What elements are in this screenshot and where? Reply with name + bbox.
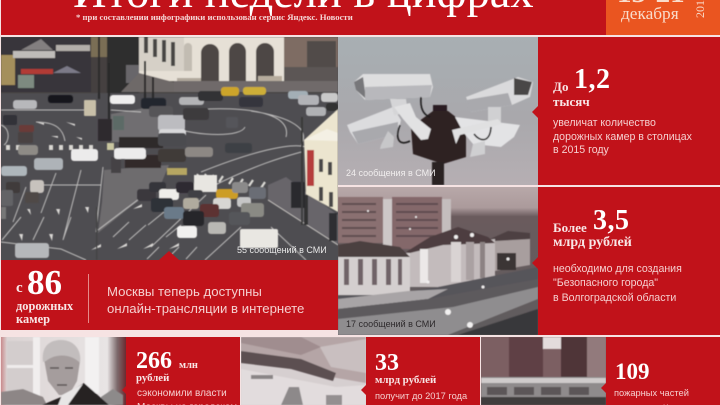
number 266: 266 xyxy=(136,348,172,374)
road markings xyxy=(1,109,306,260)
description xyxy=(107,284,304,316)
panel: 109 fire stations xyxy=(606,337,720,405)
description: пожарных частей xyxy=(614,388,689,398)
photo: moscow intersection xyxy=(1,37,338,260)
unit: млрд рублей xyxy=(553,235,632,250)
pointer xyxy=(361,385,366,395)
description xyxy=(553,117,692,156)
unit: тысяч xyxy=(553,94,590,109)
photo: mayor portrait xyxy=(1,337,126,405)
panel: 266 million xyxy=(126,337,240,405)
source note: * при составлении инфографики использован сервис Яндекс. Новости xyxy=(76,12,353,22)
unit: камер xyxy=(16,312,50,326)
description: дорожных камер в столицах xyxy=(553,130,692,142)
pointer xyxy=(532,257,538,269)
street xyxy=(338,267,538,327)
unit: дорожных xyxy=(16,299,73,313)
divider xyxy=(88,274,89,323)
label: 55 mentions: 55 сообщений в СМИ xyxy=(237,245,327,255)
date box xyxy=(606,0,720,35)
pointer xyxy=(532,106,538,118)
header band xyxy=(1,0,720,35)
right block xyxy=(495,233,530,271)
left lower camera xyxy=(347,107,401,144)
number 3,5: 3,5 xyxy=(593,205,630,236)
label: 24 mentions: 24 сообщения в СМИ xyxy=(346,168,436,178)
panel: 1.2 thousand xyxy=(538,37,720,185)
number 33: 33 xyxy=(375,350,399,376)
description: "Безопасного города" xyxy=(553,277,658,289)
island xyxy=(98,165,169,233)
photo: surveillance cameras xyxy=(338,37,538,185)
month: декабря xyxy=(621,4,679,23)
label: 17 mentions: 17 сообщений в СМИ xyxy=(346,319,436,329)
unit line 2: рублей xyxy=(136,372,169,384)
lead: Более xyxy=(553,220,587,235)
cars: mid xyxy=(18,145,38,155)
cars: queue xyxy=(6,182,20,193)
pointer xyxy=(122,385,127,395)
lead: До xyxy=(553,79,568,94)
photo: fire engines xyxy=(481,337,606,405)
description: в 2015 году xyxy=(553,144,609,156)
number 1,2: 1,2 xyxy=(574,64,610,95)
top left camera xyxy=(354,74,433,100)
unit: млрд рублей xyxy=(375,374,436,386)
description: онлайн-трансляции в интернете xyxy=(107,301,304,316)
description xyxy=(614,388,691,405)
preposition: с xyxy=(16,280,23,296)
panel: 3.5 billion xyxy=(538,187,720,335)
pointer xyxy=(159,251,179,260)
corner building xyxy=(304,109,338,212)
panel: 86 cameras xyxy=(1,260,338,330)
description: сэкономили власти xyxy=(137,388,227,399)
cars: far side xyxy=(13,100,37,109)
number 109: 109 xyxy=(615,359,650,384)
description: Москвы теперь доступны xyxy=(107,284,262,299)
unit xyxy=(16,299,74,326)
rear right camera xyxy=(455,117,520,147)
number 86: 86 xyxy=(27,263,62,302)
left block xyxy=(338,253,410,295)
photo: Volgograd district xyxy=(338,187,538,335)
description: необходимо для создания xyxy=(553,263,682,275)
description: увеличат количество xyxy=(553,117,656,129)
top right camera xyxy=(466,77,533,112)
description: получит до 2017 года xyxy=(375,391,467,401)
pointer xyxy=(601,383,606,393)
description xyxy=(553,263,682,304)
description: в Волгоградской области xyxy=(553,292,676,304)
panel: 33 billion xyxy=(366,337,480,405)
photo: banknotes xyxy=(241,337,366,405)
center block xyxy=(410,239,495,287)
upper streetscape xyxy=(1,37,338,93)
central plaza xyxy=(111,107,171,142)
description xyxy=(137,388,237,405)
right sidewalk xyxy=(268,177,338,245)
unit: млн xyxy=(179,360,198,371)
